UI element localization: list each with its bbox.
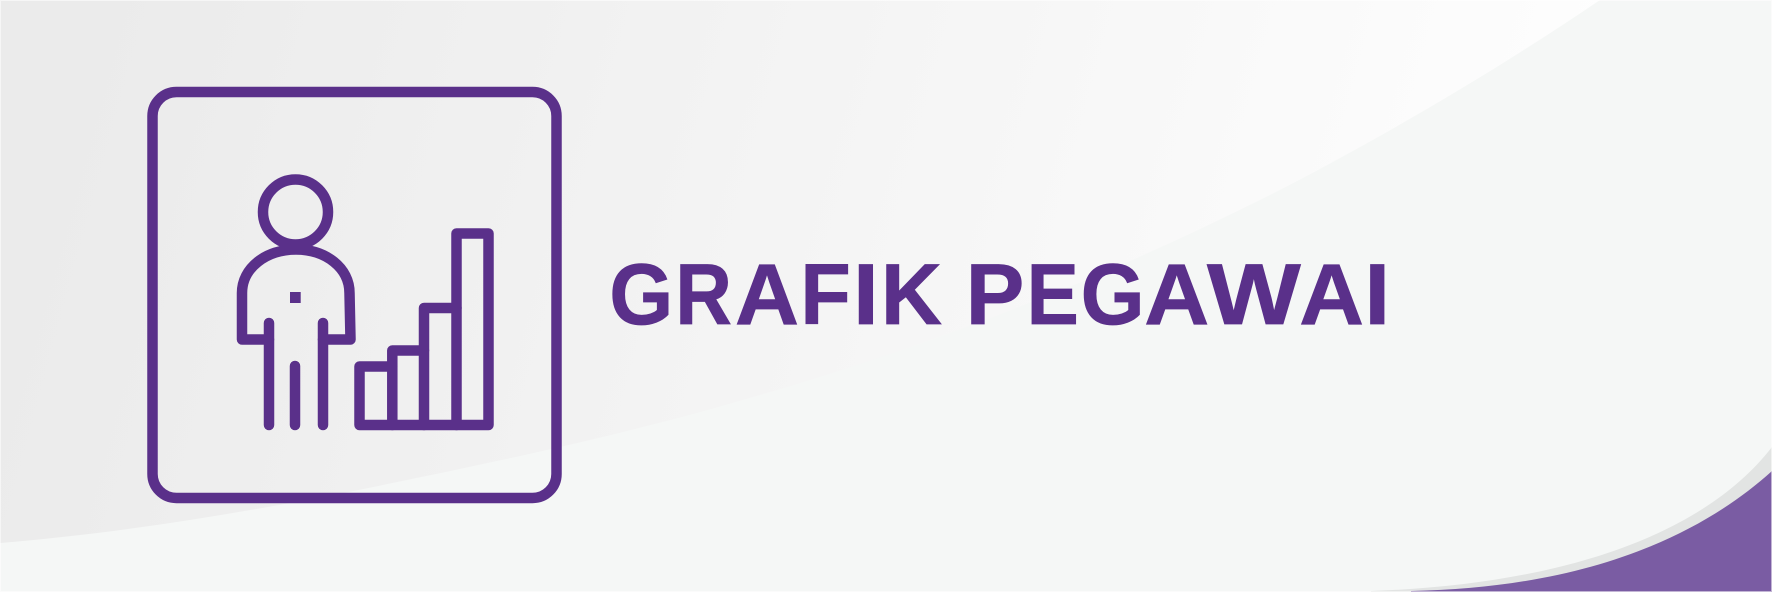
corner accent: purple swoosh	[1411, 471, 1772, 592]
icon: bar chart	[360, 234, 488, 425]
title: F	[800, 247, 851, 343]
bar dividers	[392, 308, 456, 425]
title: R	[675, 247, 732, 343]
icon frame	[152, 92, 556, 498]
title: A	[735, 247, 799, 343]
person right leg	[318, 323, 328, 425]
icon: employee and bar chart in rounded frame	[152, 92, 556, 498]
title: A	[1299, 247, 1364, 343]
person button	[290, 292, 301, 303]
icon: person	[242, 180, 350, 425]
person centre leg	[290, 366, 300, 425]
title: A	[1144, 247, 1209, 343]
title: G	[609, 247, 673, 343]
title: K	[881, 247, 942, 343]
title: G	[1081, 247, 1144, 343]
person head	[263, 180, 328, 244]
title: E	[1027, 247, 1079, 343]
bar chart outline	[360, 234, 488, 425]
title: I	[1364, 247, 1390, 343]
title: I	[853, 247, 879, 343]
title: W	[1207, 247, 1302, 343]
corner accent: grey swoosh	[1371, 447, 1772, 592]
person left leg	[264, 323, 274, 425]
title: P	[966, 247, 1024, 343]
person body	[242, 250, 350, 340]
